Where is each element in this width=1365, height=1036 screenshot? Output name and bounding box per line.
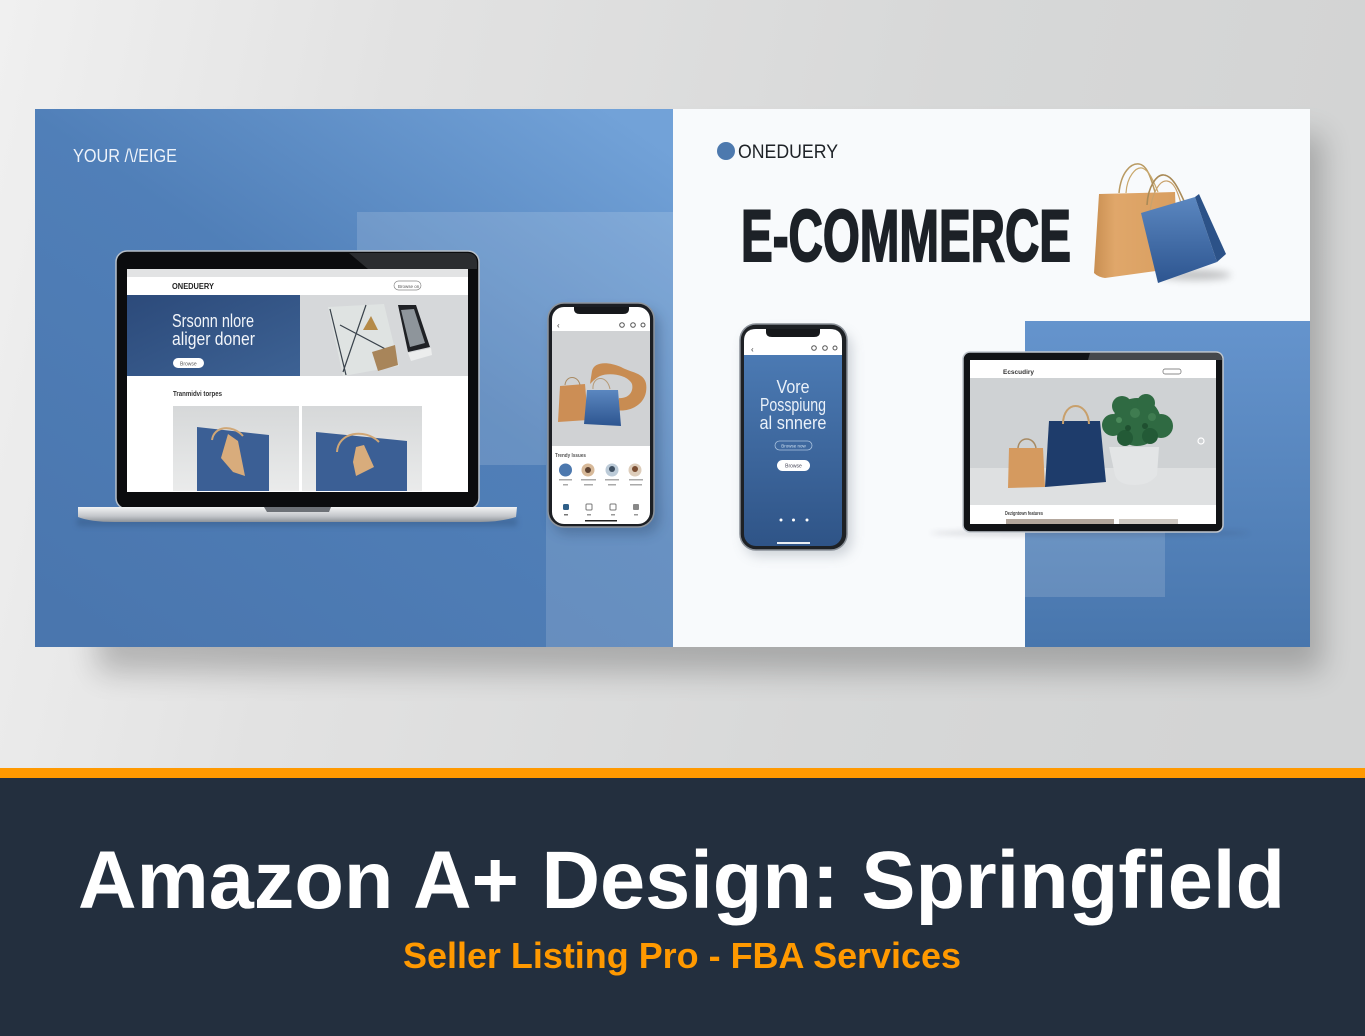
product photo	[552, 331, 650, 446]
promo text	[760, 377, 826, 433]
phone mockup: promo screen: Browse	[785, 464, 802, 470]
promo text: Vore	[776, 377, 810, 397]
laptop screen: ONEDUERY	[172, 282, 215, 291]
laptop bezel	[116, 251, 479, 509]
promo text: al snnere	[760, 413, 826, 433]
banner drop shadow	[97, 135, 1322, 672]
phone mockup: product page: Trendy Issues	[555, 453, 586, 459]
laptop screen	[127, 269, 468, 492]
phone mockup: promo screen: Browse now	[781, 444, 807, 448]
phone mockup: product page: ‹	[557, 321, 560, 330]
laptop screen: Browse on	[398, 284, 420, 289]
icon: shopping bags	[1094, 164, 1231, 283]
footer panel	[0, 778, 1365, 1036]
hero image	[300, 295, 468, 376]
heading: e-commerce: E-COMMERCE	[741, 196, 1071, 277]
translucent overlay block	[357, 212, 673, 647]
bottom navigation	[563, 504, 639, 522]
laptop base	[78, 507, 517, 522]
product photo left	[173, 406, 299, 491]
phone mockup: promo screen	[740, 324, 852, 556]
laptop screen: Srsonn nlore	[172, 311, 254, 331]
tablet mockup: Ecscudiry	[1003, 369, 1034, 376]
page background	[0, 0, 1365, 768]
brand label: your image: YOUR /\/EIGE	[73, 146, 177, 166]
footer subtitle: Seller Listing Pro - FBA Services	[403, 935, 961, 976]
hero banner	[127, 295, 300, 376]
translucent block	[1025, 465, 1165, 597]
footer accent stripe	[0, 768, 1365, 778]
laptop mockup	[77, 251, 517, 526]
phone mockup: product page	[548, 303, 660, 534]
tablet hero photo	[970, 378, 1216, 505]
footer title: Amazon A+ Design: Springfield	[78, 835, 1285, 926]
laptop screen: aliger doner	[172, 329, 255, 349]
promo text: Posspiung	[760, 395, 826, 415]
category circles	[559, 464, 643, 486]
laptop screen: Tranmidvi torpes	[173, 391, 222, 398]
blue corner block	[1025, 321, 1310, 647]
panel: right white showcase	[673, 109, 1310, 647]
brand logo: oneduery: ONEDUERY	[738, 142, 838, 163]
panel: left blue showcase	[35, 109, 673, 647]
tablet mockup: Dezigntown features	[1005, 511, 1043, 517]
product photo right	[302, 406, 422, 491]
phone mockup: promo screen: ‹	[751, 345, 754, 354]
plant	[1102, 394, 1173, 446]
tablet mockup	[930, 352, 1250, 536]
laptop screen: Browse	[180, 362, 197, 368]
